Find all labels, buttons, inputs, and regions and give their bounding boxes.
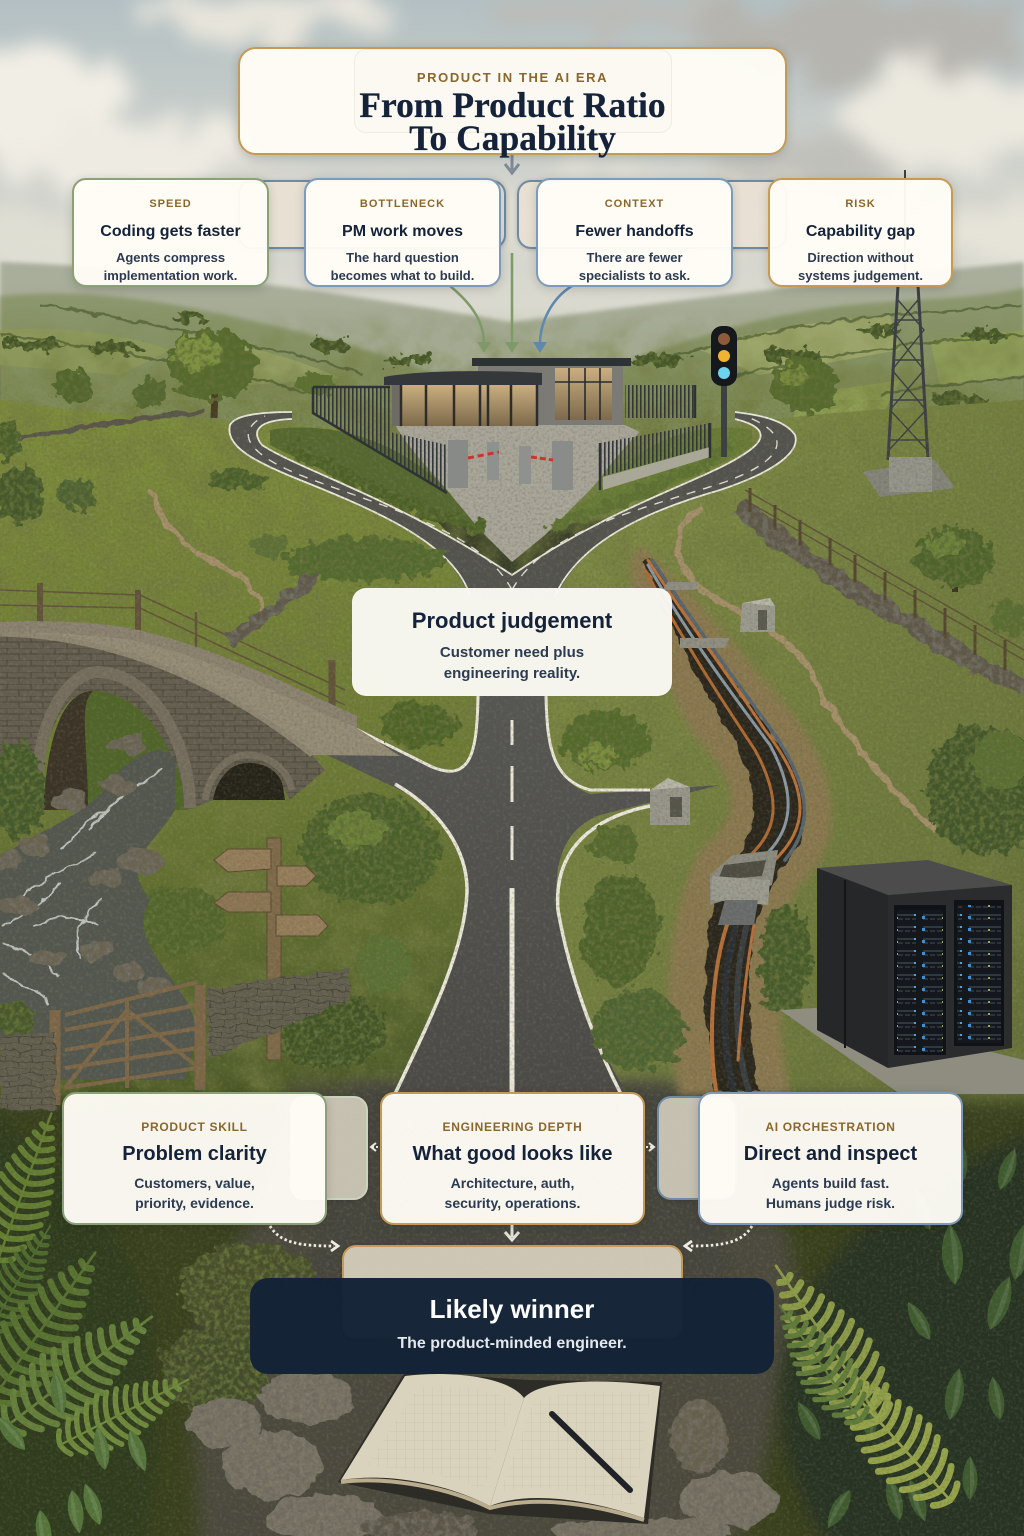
- text: There are fewer: [586, 250, 683, 265]
- text: [331, 250, 474, 283]
- text: Architecture, auth,: [451, 1175, 574, 1191]
- heading: Problem clarity: [122, 1143, 267, 1165]
- eyebrow: CONTEXT: [605, 198, 664, 210]
- text: [440, 644, 584, 682]
- ghost card: upper right behind: [517, 180, 787, 249]
- signpost: [214, 838, 328, 1060]
- heading: PM work moves: [342, 223, 463, 240]
- heading: Fewer handoffs: [575, 223, 694, 240]
- arrow: engineering to winner: [505, 1224, 519, 1240]
- rolling hills: [0, 262, 1024, 520]
- text: specialists to ask.: [579, 268, 690, 283]
- card: likely winner: [250, 1278, 774, 1374]
- wall on distant meadow: [20, 410, 205, 438]
- texture overlay: [0, 360, 1024, 1536]
- arrow: title to row: [505, 154, 519, 173]
- utility boxes: [740, 598, 775, 632]
- card: context: [536, 178, 733, 287]
- radio tower: [863, 170, 955, 497]
- heading: Likely winner: [430, 1294, 594, 1324]
- road island bushes: [130, 470, 811, 1070]
- text: Humans judge risk.: [766, 1195, 895, 1211]
- heading: Coding gets faster: [100, 223, 241, 240]
- foliage left: [0, 1100, 201, 1536]
- card: AI orchestration: [698, 1092, 963, 1225]
- stream with rocks: [0, 736, 196, 1080]
- eyebrow: AI ORCHESTRATION: [765, 1120, 896, 1134]
- text: priority, evidence.: [135, 1195, 254, 1211]
- text: Customer need plus: [440, 644, 584, 661]
- text: security, operations.: [445, 1195, 580, 1211]
- arrow: dotted to left card: [371, 1143, 378, 1151]
- grass foreground: [0, 400, 1024, 1536]
- arrow: green centre to building: [505, 253, 519, 353]
- faint inner pane: [354, 49, 672, 133]
- arrow: dotted product skill to winner: [270, 1226, 338, 1251]
- card: engineering depth: [380, 1092, 645, 1225]
- arrow: dotted orchestration to winner: [685, 1226, 752, 1251]
- heading: Direct and inspect: [744, 1143, 917, 1165]
- card: bottleneck: [304, 178, 501, 287]
- wall left meadow: [228, 560, 325, 640]
- stone bridge: [0, 621, 400, 815]
- eyebrow: ENGINEERING DEPTH: [443, 1120, 582, 1134]
- text: Customers, value,: [134, 1175, 255, 1191]
- ghost card: lower left behind: [290, 1096, 368, 1200]
- stone wall and fence right: [740, 488, 1024, 690]
- notebook and pen: [338, 1372, 662, 1524]
- text: becomes what to build.: [331, 268, 474, 283]
- eyebrow: PRODUCT IN THE AI ERA: [417, 70, 608, 85]
- text: [798, 250, 923, 283]
- ghost card: upper left behind: [238, 180, 506, 249]
- heading: Product judgement: [412, 608, 612, 633]
- main title: From Product Ratio: [359, 85, 666, 125]
- ghost card: lower right behind: [657, 1096, 737, 1200]
- card: product skill: [62, 1092, 327, 1225]
- text: Agents build fast.: [772, 1175, 889, 1191]
- main road and junctions: [300, 694, 720, 1096]
- lower ground: [160, 1085, 795, 1536]
- ghost card: winner behind: [342, 1245, 683, 1339]
- text: systems judgement.: [798, 268, 923, 283]
- foliage right: [747, 1130, 1024, 1536]
- text: [134, 1175, 255, 1211]
- text: engineering reality.: [444, 665, 580, 682]
- main title: [359, 85, 666, 158]
- main title: To Capability: [409, 118, 616, 158]
- arrow: dotted to right card: [646, 1143, 654, 1151]
- arrow: green curve to building: [450, 286, 491, 353]
- dirt paths: [150, 490, 935, 830]
- title panel: [238, 47, 787, 155]
- card: risk: [768, 178, 953, 287]
- forked roads to the building: [229, 412, 796, 600]
- heading: Capability gap: [806, 223, 915, 240]
- eyebrow: SPEED: [149, 198, 192, 210]
- dry stone walls: [0, 968, 350, 1110]
- card: product judgement: [352, 588, 672, 696]
- text: The product-minded engineer.: [397, 1335, 627, 1352]
- text: The hard question: [346, 250, 459, 265]
- text: [579, 250, 690, 283]
- text: implementation work.: [104, 268, 237, 283]
- text: [445, 1175, 580, 1211]
- arrow: blue curve to building: [533, 286, 572, 353]
- eyebrow: BOTTLENECK: [360, 198, 445, 210]
- text: Direction without: [807, 250, 914, 265]
- server cabinet and pad: [780, 860, 1024, 1094]
- text: [766, 1175, 895, 1211]
- cable trench: [630, 545, 832, 1095]
- heading: What good looks like: [412, 1143, 612, 1165]
- trees: [0, 329, 1024, 855]
- card: speed: [72, 178, 269, 287]
- text: [104, 250, 237, 283]
- eyebrow: RISK: [845, 198, 876, 210]
- building: [384, 358, 631, 426]
- text: Agents compress: [116, 250, 225, 265]
- building lawns and forecourt: [270, 425, 752, 562]
- rocks under notebook: [189, 1372, 780, 1536]
- wooden gate: [55, 982, 200, 1105]
- sky and clouds: [0, 0, 1024, 340]
- perimeter fences and gates: [313, 385, 710, 493]
- traffic light: [711, 326, 737, 457]
- meadow fence left: [0, 583, 345, 722]
- eyebrow: PRODUCT SKILL: [141, 1120, 248, 1134]
- lower road utility box: [650, 778, 690, 825]
